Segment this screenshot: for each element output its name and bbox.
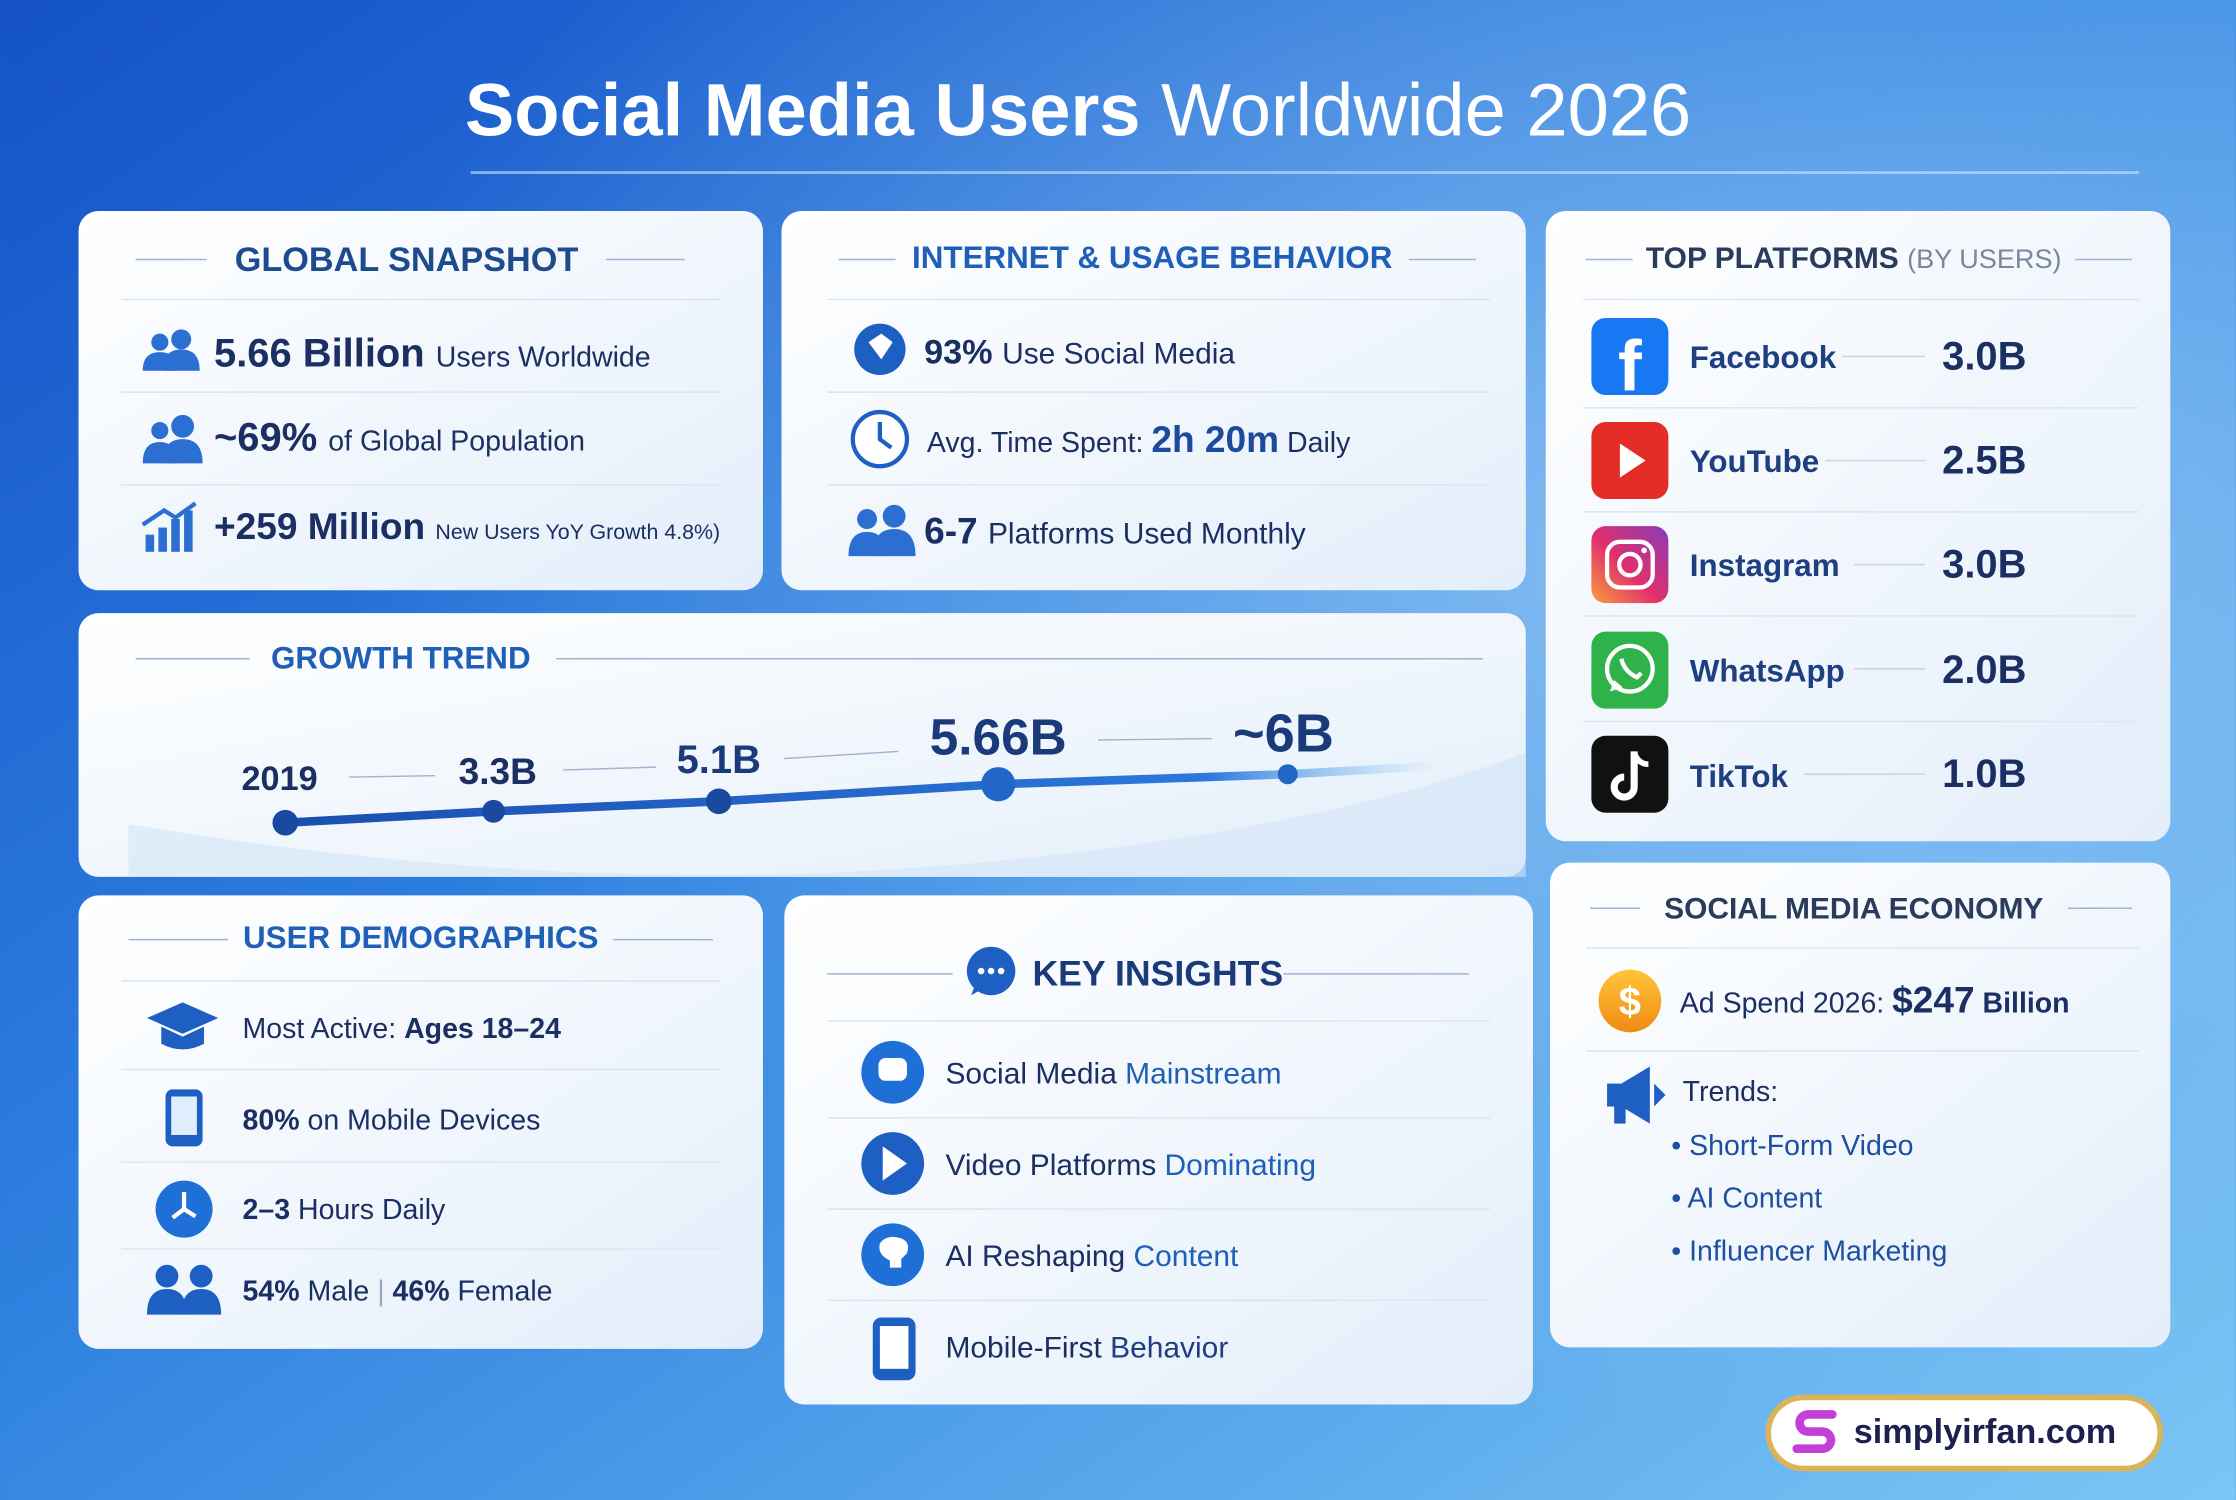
stat: 93%: 93% Use Social Media — [924, 334, 1235, 372]
stat: ad spend: Ad Spend 2026: $247 Billion — [1680, 978, 2070, 1020]
row: tiktok — [1591, 736, 2026, 813]
heading: key insights: KEY INSIGHTS — [1032, 953, 1283, 993]
icon: coin — [1599, 970, 1661, 1032]
stat: hours: 2–3 Hours Daily — [243, 1194, 446, 1226]
row: facebook: Facebook — [1690, 340, 1837, 375]
insight: mainstream: Social Media Mainstream — [945, 1058, 1282, 1091]
row: whatsapp: 2.0B — [1942, 648, 2026, 692]
row: instagram: Instagram — [1690, 548, 1840, 583]
row: whatsapp: WhatsApp — [1690, 654, 1845, 689]
stat: time spent: Avg. Time Spent: 2h 20m Daily — [927, 418, 1351, 460]
stat: age: Most Active: Ages 18–24 — [243, 1013, 561, 1045]
panel: internet & usage — [781, 211, 1526, 590]
insight: AI: AI Reshaping Content — [945, 1240, 1239, 1273]
icon: users — [143, 329, 200, 371]
row: youtube: YouTube — [1690, 444, 1819, 479]
insight: AI — [861, 1223, 1239, 1286]
heading: demographics: USER DEMOGRAPHICS — [243, 920, 598, 955]
heading: global snapshot: GLOBAL SNAPSHOT — [235, 241, 578, 279]
icon: shield — [854, 324, 906, 375]
row: facebook: f — [1618, 327, 1642, 407]
text: trends: Trends: — [1683, 1076, 1778, 1108]
panel: growth trend — [79, 613, 1526, 877]
row: facebook: 3.0B — [1942, 334, 2026, 378]
stat: new users: +259 Million New Users YoY Growth 4.8%) — [214, 505, 720, 547]
stat: gender: 54% Male | 46% Female — [243, 1275, 553, 1307]
line chart: user growth: 5.66B — [930, 708, 1067, 765]
icon: megaphone — [1607, 1067, 1666, 1124]
title: Social Media Users Worldwide 2026 — [465, 68, 1691, 151]
heading: internet usage: INTERNET & USAGE BEHAVIOR — [912, 240, 1392, 275]
line chart: user growth — [242, 703, 1440, 836]
text: trends: • AI Content — [1671, 1183, 1822, 1215]
row: facebook — [1591, 318, 2026, 407]
insight: mobile-first: Mobile-First Behavior — [945, 1331, 1228, 1364]
panel: global snapshot — [79, 211, 763, 590]
text: trends: • Influencer Marketing — [1671, 1235, 1947, 1267]
heading: economy: SOCIAL MEDIA ECONOMY — [1664, 892, 2043, 925]
panel: top platforms — [1546, 211, 2170, 841]
logo: simplyirfan.com — [1768, 1397, 2160, 1469]
row: whatsapp — [1591, 632, 2026, 709]
line chart: user growth: 3.3B — [459, 750, 537, 792]
panel: social media economy — [1550, 863, 2170, 1347]
row: youtube: 2.5B — [1942, 438, 2026, 482]
row: instagram: 3.0B — [1942, 542, 2026, 586]
icon: population — [143, 415, 203, 463]
text: trends — [1671, 1076, 1947, 1267]
stat: population: ~69% of Global Population — [214, 416, 585, 460]
icon: phone — [166, 1089, 203, 1146]
panel: user demographics — [79, 895, 763, 1349]
row: youtube — [1591, 422, 2026, 499]
icon: graduation cap — [147, 1002, 218, 1049]
icon: coin: $ — [1619, 980, 1641, 1024]
line chart: user growth: 2019 — [242, 760, 318, 798]
icon: gender — [147, 1265, 221, 1315]
row: tiktok: TikTok — [1690, 759, 1788, 794]
logo: simplyirfan.com: simplyirfan.com — [1854, 1413, 2116, 1451]
text: trends: • Short-Form Video — [1671, 1130, 1914, 1162]
stat: mobile: 80% on Mobile Devices — [243, 1104, 540, 1136]
stat: users worldwide: 5.66 Billion Users Worldwide — [214, 331, 651, 375]
icon: clock — [853, 412, 907, 466]
stat: platforms: 6-7 Platforms Used Monthly — [924, 509, 1306, 551]
row: instagram — [1591, 526, 2026, 603]
icon: people — [849, 505, 916, 556]
row: tiktok: 1.0B — [1942, 752, 2026, 796]
heading: growth trend: GROWTH TREND — [271, 641, 531, 676]
icon: growth chart — [143, 503, 195, 552]
insight: mobile-first — [873, 1317, 1228, 1380]
line chart: user growth: 5.1B — [677, 738, 761, 782]
panel: key insights — [784, 895, 1533, 1404]
insight: video — [861, 1132, 1316, 1195]
line chart: user growth: ~6B — [1233, 703, 1334, 763]
insight: mainstream — [861, 1041, 1282, 1104]
icon: clock — [156, 1181, 213, 1238]
heading: key insights — [827, 947, 1469, 995]
insight: video: Video Platforms Dominating — [945, 1149, 1316, 1182]
heading: top platforms: TOP PLATFORMS (BY USERS) — [1646, 242, 2062, 275]
